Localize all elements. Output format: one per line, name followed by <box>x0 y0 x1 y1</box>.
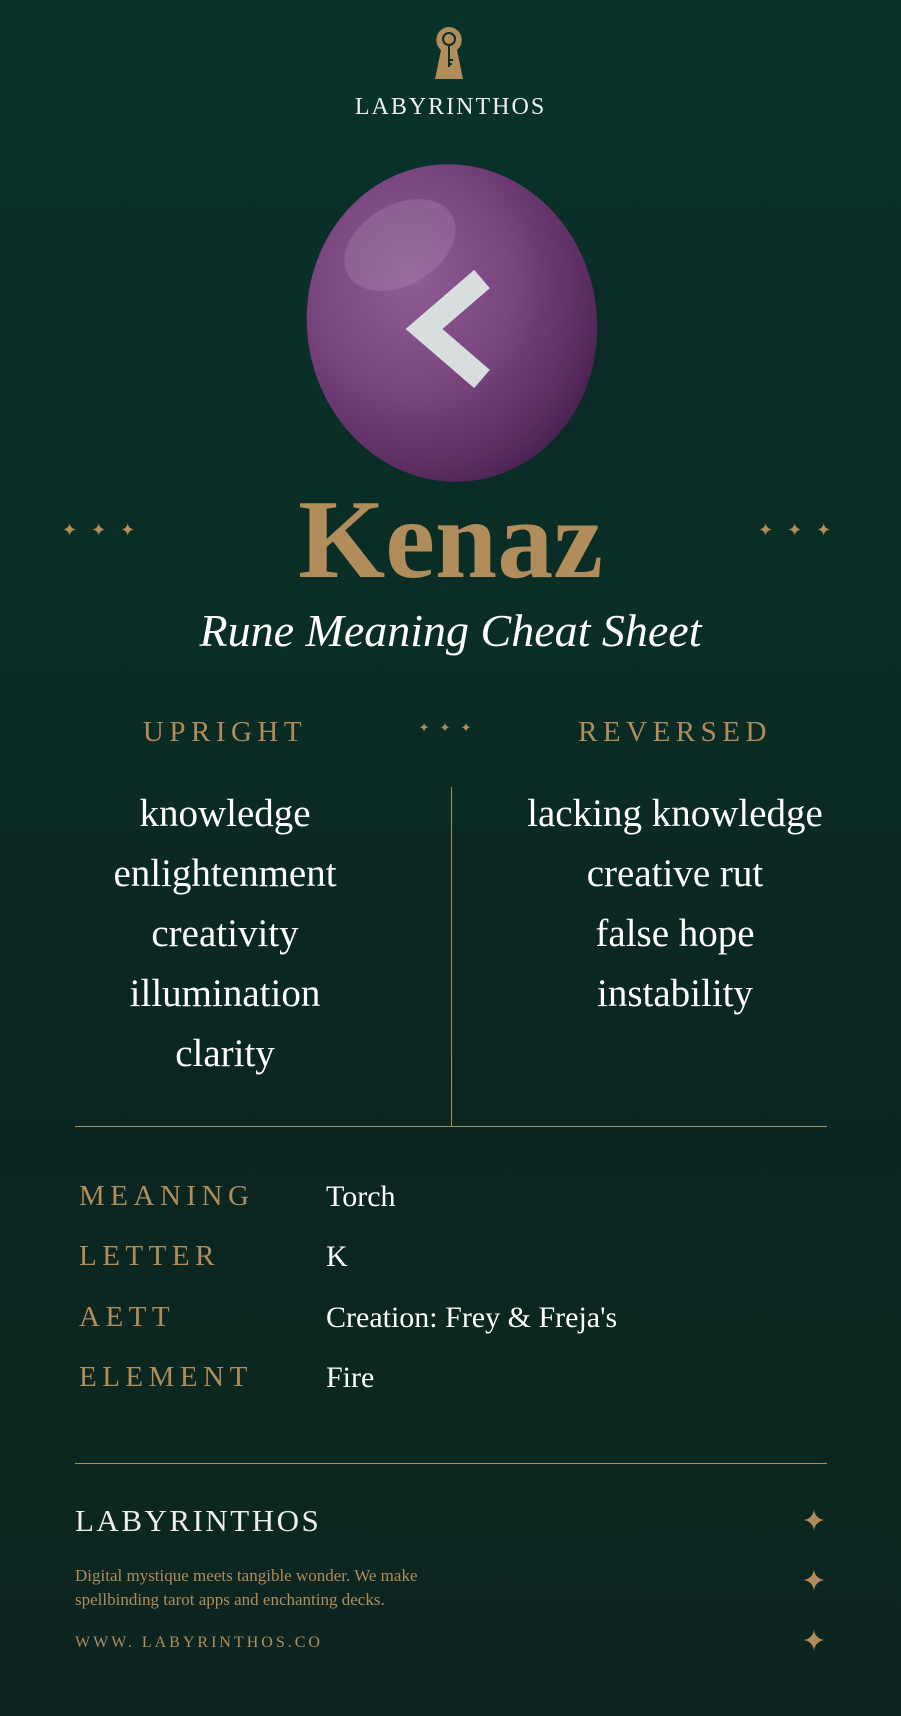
table: rune facts: K <box>326 1240 348 1273</box>
stars left: ✦✦✦ <box>62 520 149 540</box>
table: rune facts: Creation: Frey & Freja's <box>326 1301 617 1334</box>
list: reversed: false hope <box>595 912 755 955</box>
list: upright: enlightenment <box>113 852 337 895</box>
stars right: ✦✦✦ <box>758 520 845 540</box>
icon: purple rune stone <box>306 164 598 482</box>
list: upright: illumination <box>130 972 320 1015</box>
footer stars: ✦ <box>801 1565 827 1598</box>
table: rune facts: MEANING <box>79 1180 254 1212</box>
table: rune facts: Torch <box>326 1180 396 1213</box>
list: reversed: creative rut <box>587 852 763 895</box>
footer divider <box>75 1463 827 1464</box>
list: reversed: instability <box>597 972 753 1015</box>
footer description: spellbinding tarot apps and enchanting decks. <box>75 1590 385 1609</box>
title: Kenaz: Kenaz <box>298 478 603 602</box>
table: rune facts: Fire <box>326 1361 374 1394</box>
table: rune facts: ELEMENT <box>79 1361 253 1393</box>
list: reversed: lacking knowledge <box>527 792 823 835</box>
heading: upright: UPRIGHT <box>143 716 307 748</box>
heading: reversed: REVERSED <box>578 716 772 748</box>
divider <box>75 1126 827 1127</box>
small stars center: ✦✦✦ <box>419 720 481 735</box>
table: rune facts <box>79 1180 617 1394</box>
brand name top: LABYRINTHOS <box>355 94 546 120</box>
list: upright <box>113 792 337 1075</box>
footer stars: ✦ <box>801 1625 827 1658</box>
vertical divider <box>451 787 452 1126</box>
list: upright: creativity <box>151 912 299 955</box>
footer stars: ✦ <box>801 1505 827 1538</box>
footer url: WWW. LABYRINTHOS.CO <box>75 1634 323 1651</box>
list: upright: knowledge <box>139 792 311 835</box>
footer description <box>75 1566 418 1609</box>
icon: keyhole logo <box>435 27 463 79</box>
rune: Kenaz <box>424 279 482 379</box>
table: rune facts: LETTER <box>79 1240 220 1272</box>
list: reversed <box>527 792 823 1015</box>
footer brand: LABYRINTHOS <box>75 1503 321 1538</box>
table: rune facts: AETT <box>79 1301 175 1333</box>
subtitle: Rune Meaning Cheat Sheet <box>199 605 702 656</box>
list: upright: clarity <box>175 1032 275 1075</box>
footer description: Digital mystique meets tangible wonder. We make <box>75 1566 418 1585</box>
footer stars <box>801 1505 827 1658</box>
